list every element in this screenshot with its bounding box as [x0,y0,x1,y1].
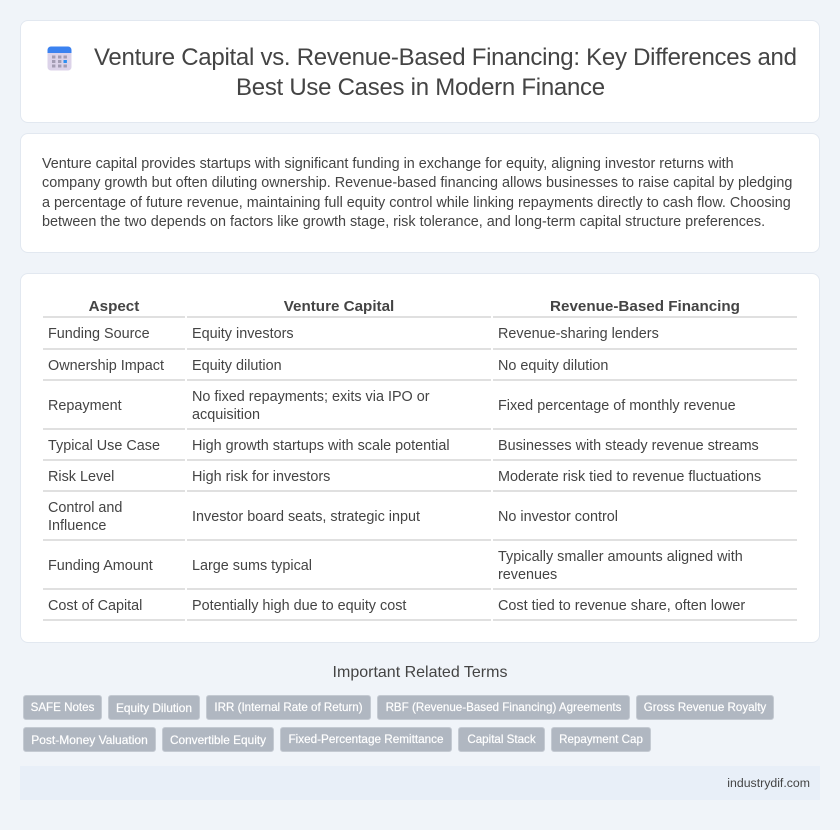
tag: Gross Revenue Royalty [644,701,766,714]
row: control and influence: Control and [48,500,122,516]
tag [206,695,371,720]
tag [108,695,200,720]
icon: calendar [48,46,72,70]
title: Venture Capital vs. Revenue-Based Financing: Key Differences and [94,44,797,71]
row: repayment: No fixed repayments; exits via IPO or [192,388,430,404]
row: funding amount: Funding Amount [48,558,153,574]
tag: SAFE Notes [31,701,94,714]
intro text: company growth but often diluting ownership. Revenue-based financing allows businesses to raise capital by pledging [42,175,792,191]
row: ownership impact: No equity dilution [498,358,608,374]
row: typical use case: High growth startups with scale potential [192,438,450,454]
row: repayment [43,388,797,430]
intro text [42,156,792,230]
tag: Convertible Equity [170,733,266,747]
row: funding source: Equity investors [192,326,294,342]
row: control and influence: No investor control [498,508,618,524]
row: ownership impact: Ownership Impact [48,358,164,374]
row: funding amount: Typically smaller amounts aligned with [498,548,743,564]
row: ownership impact: Equity dilution [192,358,282,374]
row: control and influence: Investor board seats, strategic input [192,508,420,524]
row: risk level: High risk for investors [192,468,330,484]
title: Best Use Cases in Modern Finance [236,74,605,101]
row: funding source [43,326,797,350]
tag: Post-Money Valuation [31,733,148,747]
row: repayment: Fixed percentage of monthly revenue [498,398,736,414]
intro paragraph panel [20,133,820,253]
row: typical use case [43,438,797,461]
row: control and influence: Influence [48,518,106,534]
footer source: industrydif.com [727,776,810,790]
title [94,44,797,101]
tag: Repayment Cap [559,733,643,746]
header panel [20,20,820,123]
row: funding amount [43,548,797,590]
row: funding source: Revenue-sharing lenders [498,326,659,342]
table header row: Revenue-Based Financing [550,298,740,315]
tag [636,695,774,720]
comparison table [43,298,797,621]
tag [551,727,651,752]
related terms row 2 [23,727,651,752]
row: risk level: Risk Level [48,468,114,484]
tag [23,727,156,752]
row: funding amount: revenues [498,566,557,582]
row: repayment: Repayment [48,398,122,414]
row: funding source: Funding Source [48,326,150,342]
tag [280,727,452,752]
footer bar [20,766,820,800]
row: cost of capital [43,598,797,621]
tag [162,727,274,752]
related terms row 1 [23,695,774,720]
comparison table panel [20,273,820,643]
tag: Equity Dilution [116,701,192,715]
row: funding amount: Large sums typical [192,558,312,574]
tag: IRR (Internal Rate of Return) [214,701,363,714]
row: repayment: acquisition [192,406,260,422]
row: cost of capital: Cost of Capital [48,598,142,614]
intro text: Venture capital provides startups with significant funding in exchange for equity, aligning investor returns with [42,156,734,172]
table header row [43,298,797,621]
row: cost of capital: Potentially high due to equity cost [192,598,406,614]
tag [377,695,630,720]
row: risk level: Moderate risk tied to revenue fluctuations [498,468,761,484]
related terms heading: Important Related Terms [333,664,507,681]
row: risk level [43,468,797,492]
tag [458,727,545,752]
intro text: between the two depends on factors like growth stage, risk tolerance, and long-term capital structure preferences. [42,214,765,230]
table header row: Aspect [89,298,139,315]
tag: RBF (Revenue-Based Financing) Agreements [386,701,621,714]
tag: Fixed-Percentage Remittance [288,733,444,746]
intro text: a percentage of future revenue, maintaining full equity control while linking repayments directly to cash flow. Choosing [42,195,791,211]
row: cost of capital: Cost tied to revenue share, often lower [498,598,745,614]
row: typical use case: Businesses with steady revenue streams [498,438,759,454]
tag [23,695,102,720]
row: control and influence [43,500,797,541]
row: typical use case: Typical Use Case [48,438,160,454]
tag: Capital Stack [467,733,536,746]
table header row: Venture Capital [284,298,394,315]
row: ownership impact [43,358,797,381]
